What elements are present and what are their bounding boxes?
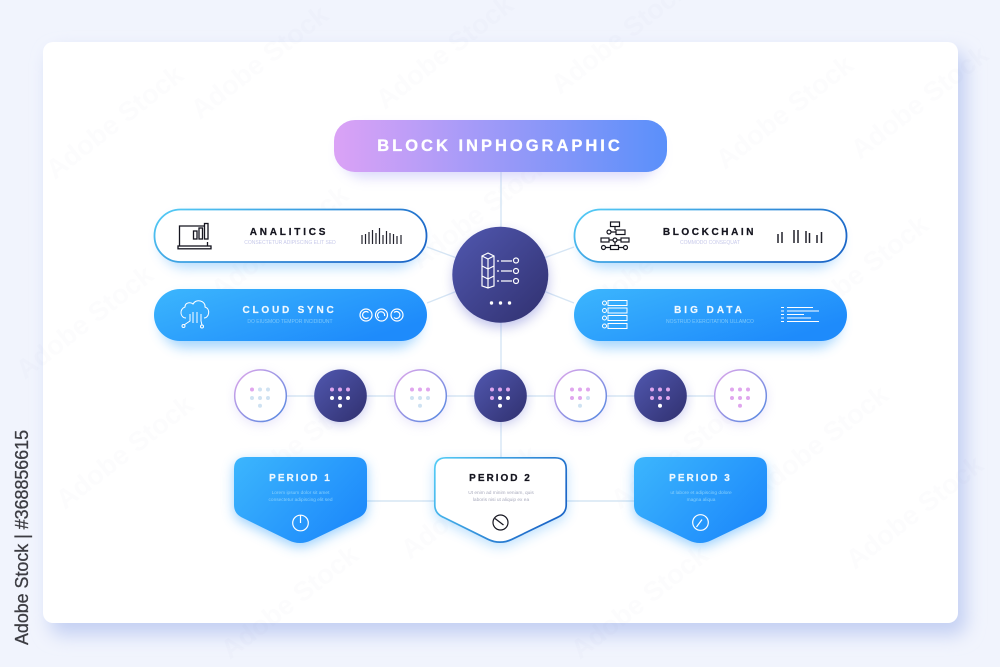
heading: big data: BIG DATA bbox=[674, 305, 745, 316]
panel: period 2 bbox=[434, 458, 567, 547]
node 5 bbox=[555, 370, 606, 424]
text: Adobe Stock bbox=[845, 39, 995, 165]
body text: period 2: laboris nisi ut aliquip ex ea bbox=[473, 497, 529, 503]
text: Adobe Stock bbox=[710, 49, 860, 175]
node 6 bbox=[634, 369, 687, 424]
text: Adobe Stock bbox=[745, 379, 895, 505]
panel: cloud sync bbox=[154, 289, 427, 348]
text: Adobe Stock bbox=[575, 199, 725, 325]
text: Adobe Stock bbox=[395, 439, 545, 565]
text: Adobe Stock bbox=[205, 179, 355, 305]
icon: bars bbox=[778, 230, 822, 243]
icon: waveform bbox=[362, 228, 401, 244]
text: Adobe Stock bbox=[185, 0, 335, 125]
node 4 bbox=[474, 369, 527, 424]
body text: period 2: Ut enim ad minim veniam, quis bbox=[468, 490, 534, 496]
body text: period 2 bbox=[468, 490, 534, 503]
body text: period 1: Lorem ipsum dolor sit amet bbox=[272, 490, 330, 496]
icon: power dial bbox=[293, 515, 308, 531]
node 2 bbox=[314, 369, 367, 424]
heading: cloud sync: CLOUD SYNC bbox=[242, 305, 337, 316]
node 1 bbox=[235, 370, 286, 424]
panel: period 1 bbox=[234, 457, 367, 547]
central hub circle bbox=[452, 227, 548, 327]
icon: block stack bbox=[482, 253, 518, 288]
text: Adobe Stock bbox=[840, 449, 990, 575]
caption: blockchain: COMMODO CONSEQUAT bbox=[680, 240, 740, 246]
text: Adobe Stock bbox=[40, 59, 190, 185]
body text: period 3: magna aliqua bbox=[687, 497, 716, 503]
panel: big data bbox=[574, 289, 847, 348]
text: Adobe Stock bbox=[565, 539, 715, 665]
text: Adobe Stock bbox=[10, 259, 160, 385]
text: Adobe Stock bbox=[785, 209, 935, 335]
caption: cloud sync: DO EIUSMOD TEMPOR INCIDIDUNT bbox=[247, 319, 333, 325]
text: Adobe Stock bbox=[605, 389, 755, 515]
heading: period 3: PERIOD 3 bbox=[669, 473, 732, 484]
icon: text lines bbox=[781, 308, 819, 322]
icon: laptop with bars bbox=[178, 224, 211, 249]
text: Adobe Stock bbox=[50, 389, 200, 515]
heading: period 1: PERIOD 1 bbox=[269, 473, 332, 484]
node row bbox=[235, 369, 766, 424]
body text: period 3 bbox=[670, 490, 732, 503]
text: Adobe Stock bbox=[405, 149, 555, 275]
title banner: BLOCK INPHOGRAPHIC bbox=[377, 137, 623, 155]
white card panel bbox=[43, 42, 958, 623]
text: Adobe Stock bbox=[215, 539, 365, 665]
icon: cloud bbox=[181, 301, 209, 328]
title banner bbox=[334, 120, 667, 178]
body text: period 1: consectetur adipiscing elit sed bbox=[268, 497, 333, 503]
three dots bbox=[490, 301, 511, 305]
caption: analitics: CONSECTETUR ADIPISCING ELIT SED bbox=[244, 240, 336, 246]
panel: analitics bbox=[154, 210, 426, 268]
icon: clock dial bbox=[493, 515, 508, 530]
body text: period 3: ut labore et adipiscing dolore bbox=[670, 490, 732, 496]
node 7 bbox=[715, 370, 766, 424]
stock image credit: Adobe Stock | #368856615 bbox=[12, 430, 32, 645]
icon: server list bbox=[602, 300, 627, 328]
heading: period 2: PERIOD 2 bbox=[469, 473, 532, 484]
body text: period 1 bbox=[268, 490, 333, 503]
caption: big data: NOSTRUD EXERCITATION ULLAMCO bbox=[666, 319, 754, 325]
icon: gauge dial bbox=[693, 515, 708, 530]
icon: three rings bbox=[360, 309, 403, 321]
node 3 bbox=[395, 370, 446, 424]
icon: flow chart bbox=[601, 222, 629, 250]
panel: period 3 bbox=[634, 457, 767, 547]
text: Adobe Stock bbox=[225, 379, 375, 505]
heading: blockchain: BLOCKCHAIN bbox=[663, 227, 756, 238]
heading: analitics: ANALITICS bbox=[250, 227, 328, 238]
panel: blockchain bbox=[574, 210, 846, 268]
connector lines bbox=[261, 172, 741, 501]
